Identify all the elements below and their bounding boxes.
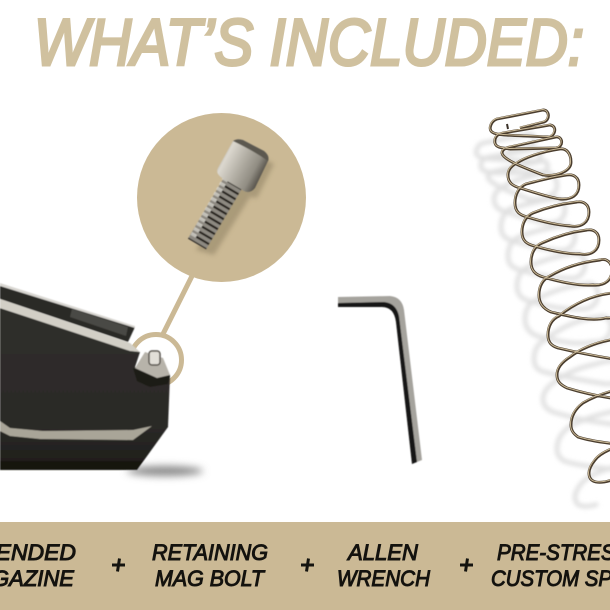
socket head [217,139,268,192]
label: allen wrench: WRENCH [337,566,430,591]
spring wire outer [490,110,610,482]
callout: connector line from bolt circle to ring [163,274,193,334]
bolt shadow [196,146,274,255]
shadow under button [133,368,170,387]
label: retaining mag bolt: RETAINING [152,540,268,565]
label: allen wrench: ALLEN [346,540,418,565]
silver button around bolt [135,352,170,378]
threaded shank [197,183,233,244]
main body [0,308,170,470]
ground shadow [127,466,203,476]
light strip along the top of body [0,299,140,352]
icon: allen wrench [338,296,422,464]
callout: ring around bolt location [130,334,182,386]
callout: large tan circle [137,113,306,282]
spring shadow [476,134,610,506]
plus sign 3 [460,558,473,572]
plus sign 2 [301,558,314,572]
bottom banner [0,522,610,610]
spring tail [507,124,508,129]
bottom dark edge [0,461,143,470]
top dark rail [0,284,135,342]
plus sign 1 [112,558,125,572]
label: pre-stressed custom spring [491,540,610,591]
head top rim [233,139,268,161]
lower silver accent [0,421,152,440]
label: extended magazine [0,540,76,591]
small bolt head [149,351,160,365]
label: retaining mag bolt: MAG BOLT [155,566,266,591]
label: allen wrench [337,540,430,591]
icon: magazine base plate [0,283,203,476]
spring wire highlight [490,110,610,482]
icon: custom spring [476,110,610,506]
label: retaining mag bolt [152,540,268,591]
icon: retaining bolt [192,139,274,255]
wrench dark inner facet [338,302,417,464]
